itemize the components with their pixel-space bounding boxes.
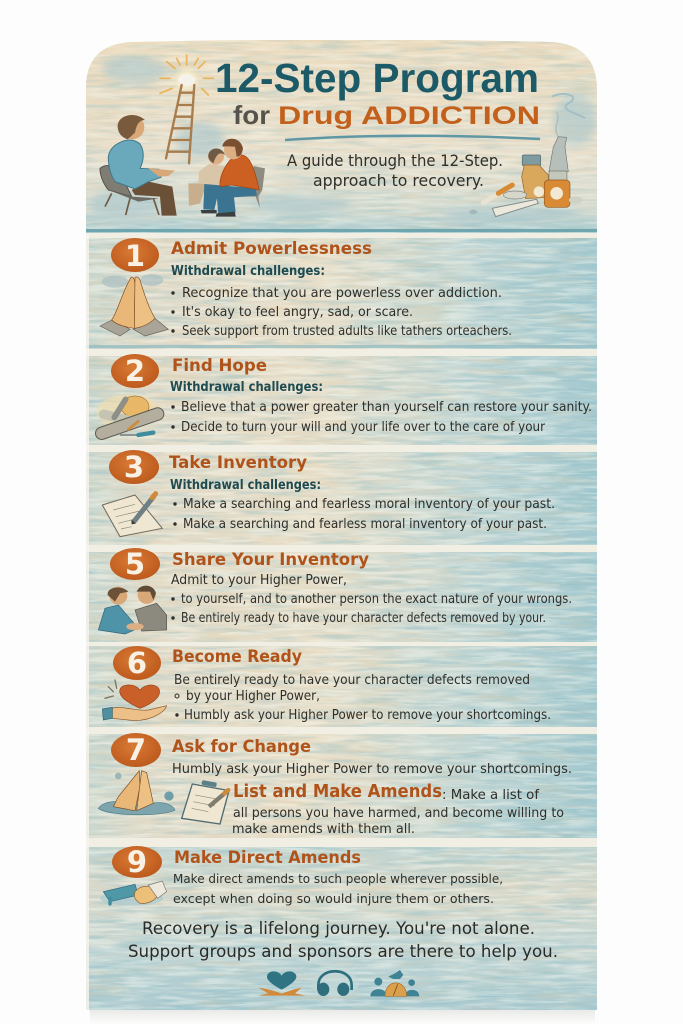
sub-step: list and make amends: List and Make Amends — [233, 781, 442, 802]
body text: except when doing so would injure them or others. — [173, 891, 494, 906]
badge 5 — [110, 547, 160, 581]
badge 2 — [111, 354, 159, 388]
badge 9 — [112, 845, 162, 879]
body text: Be entirely ready to have your character defects removed — [174, 673, 530, 688]
heading: Share Your Inventory — [172, 550, 369, 570]
bullet list: Believe that a power greater than yourself can restore your sanity. — [181, 400, 592, 415]
badge 9: 9 — [127, 845, 147, 879]
bullet list: Recognize that you are powerless over addiction. — [182, 286, 502, 301]
heading: Ask for Change — [172, 737, 311, 757]
panel: step 1 — [100, 238, 512, 339]
subtitle — [287, 151, 503, 190]
subheading: Withdrawal challenges: — [170, 478, 321, 493]
panel: step 5 — [98, 547, 572, 634]
panel: step 7 — [98, 733, 572, 837]
subtitle: approach to recovery. — [313, 171, 484, 190]
badge 3: 3 — [124, 450, 144, 484]
bullet list — [171, 592, 572, 626]
header panel — [100, 55, 585, 217]
sub-step: list and make amends: all persons you have harmed, and become willing to — [233, 806, 564, 821]
badge 5: 5 — [125, 547, 145, 581]
bullet list: to yourself, and to another person the exact nature of your wrongs. — [181, 592, 572, 607]
icon: clipboard and pencil — [182, 780, 229, 824]
bullet list — [173, 497, 555, 532]
title: for — [233, 100, 270, 130]
illustration: counsellor in chair — [100, 115, 177, 216]
icon: heart over hands — [258, 971, 306, 996]
bullet list: Seek support from trusted adults like tathers orteachers. — [182, 324, 512, 339]
icon: hand reaching for pipe — [100, 881, 167, 906]
decorative wave under title — [285, 136, 540, 140]
icon: two people talking — [98, 586, 167, 634]
heading: Admit Powerlessness — [171, 239, 372, 259]
body text: Humbly ask your Higher Power to remove your shortcomings. — [172, 762, 572, 777]
body text — [173, 871, 503, 906]
subheading: Withdrawal challenges: — [170, 380, 323, 395]
illustration: seated couple — [188, 139, 265, 217]
title — [215, 55, 540, 130]
card background — [86, 40, 598, 1010]
sub-step: list and make amends: make amends with them all. — [232, 822, 415, 837]
icon: heart in hand — [102, 680, 167, 721]
body text: Humbly ask your Higher Power to remove your shortcomings. — [184, 708, 551, 723]
heading: Make Direct Amends — [174, 848, 361, 868]
icon: notepad and pencil — [102, 494, 162, 537]
sub-step: list and make amends — [232, 781, 564, 837]
bottom shadow — [90, 1010, 595, 1024]
heading: Become Ready — [172, 647, 302, 667]
closing message: Recovery is a lifelong journey. You're not alone. — [142, 919, 535, 939]
bullet list — [171, 400, 592, 435]
icon: praying hands — [100, 274, 168, 336]
subtitle: A guide through the 12-Step. — [287, 151, 503, 170]
icon: scroll and egg — [97, 395, 160, 435]
bullet list: Make a searching and fearless moral inventory of your past. — [183, 497, 555, 512]
bullet list: Be entirely ready to have your character defects removed by your. — [181, 611, 546, 626]
body text: by your Higher Power, — [186, 689, 320, 704]
bullet list: Decide to turn your will and your life over to the care of your — [181, 420, 545, 435]
title: 12-Step Program — [215, 55, 539, 101]
badge 6 — [113, 646, 161, 680]
badge 7: 7 — [126, 733, 146, 767]
bullet list: It's okay to feel angry, sad, or scare. — [182, 305, 413, 320]
panel: step 6 — [102, 646, 551, 723]
panel: step 9 — [100, 845, 503, 906]
title: Drug ADDICTION — [278, 102, 540, 130]
subheading: Withdrawal challenges: — [171, 264, 325, 279]
closing message: Support groups and sponsors are there to help you. — [128, 942, 558, 962]
badge 3 — [109, 450, 159, 484]
panel: step 3 — [102, 450, 555, 537]
bullet list — [171, 286, 512, 339]
illustration: bottles and pills — [469, 94, 585, 217]
intro line: Admit to your Higher Power, — [171, 573, 347, 588]
heading: Take Inventory — [169, 453, 307, 473]
panel: step 2 — [97, 354, 592, 435]
badge 7 — [111, 733, 161, 767]
bullet list: Make a searching and fearless moral inventory of your past. — [183, 517, 547, 532]
badge 1: 1 — [125, 239, 145, 273]
sub-step: list and make amends: : Make a list of — [442, 788, 539, 803]
badge 1 — [111, 238, 159, 273]
body text: Make direct amends to such people wherever possible, — [173, 871, 503, 886]
illustration: ladder with sun — [160, 55, 213, 163]
icon: headphones — [311, 969, 359, 997]
heading: Find Hope — [172, 356, 267, 376]
icon: praying hands — [98, 771, 175, 815]
body text — [174, 673, 551, 723]
badge 2: 2 — [125, 354, 145, 388]
badge 6: 6 — [127, 646, 147, 680]
closing message — [128, 919, 558, 962]
icon: support group — [370, 970, 419, 996]
